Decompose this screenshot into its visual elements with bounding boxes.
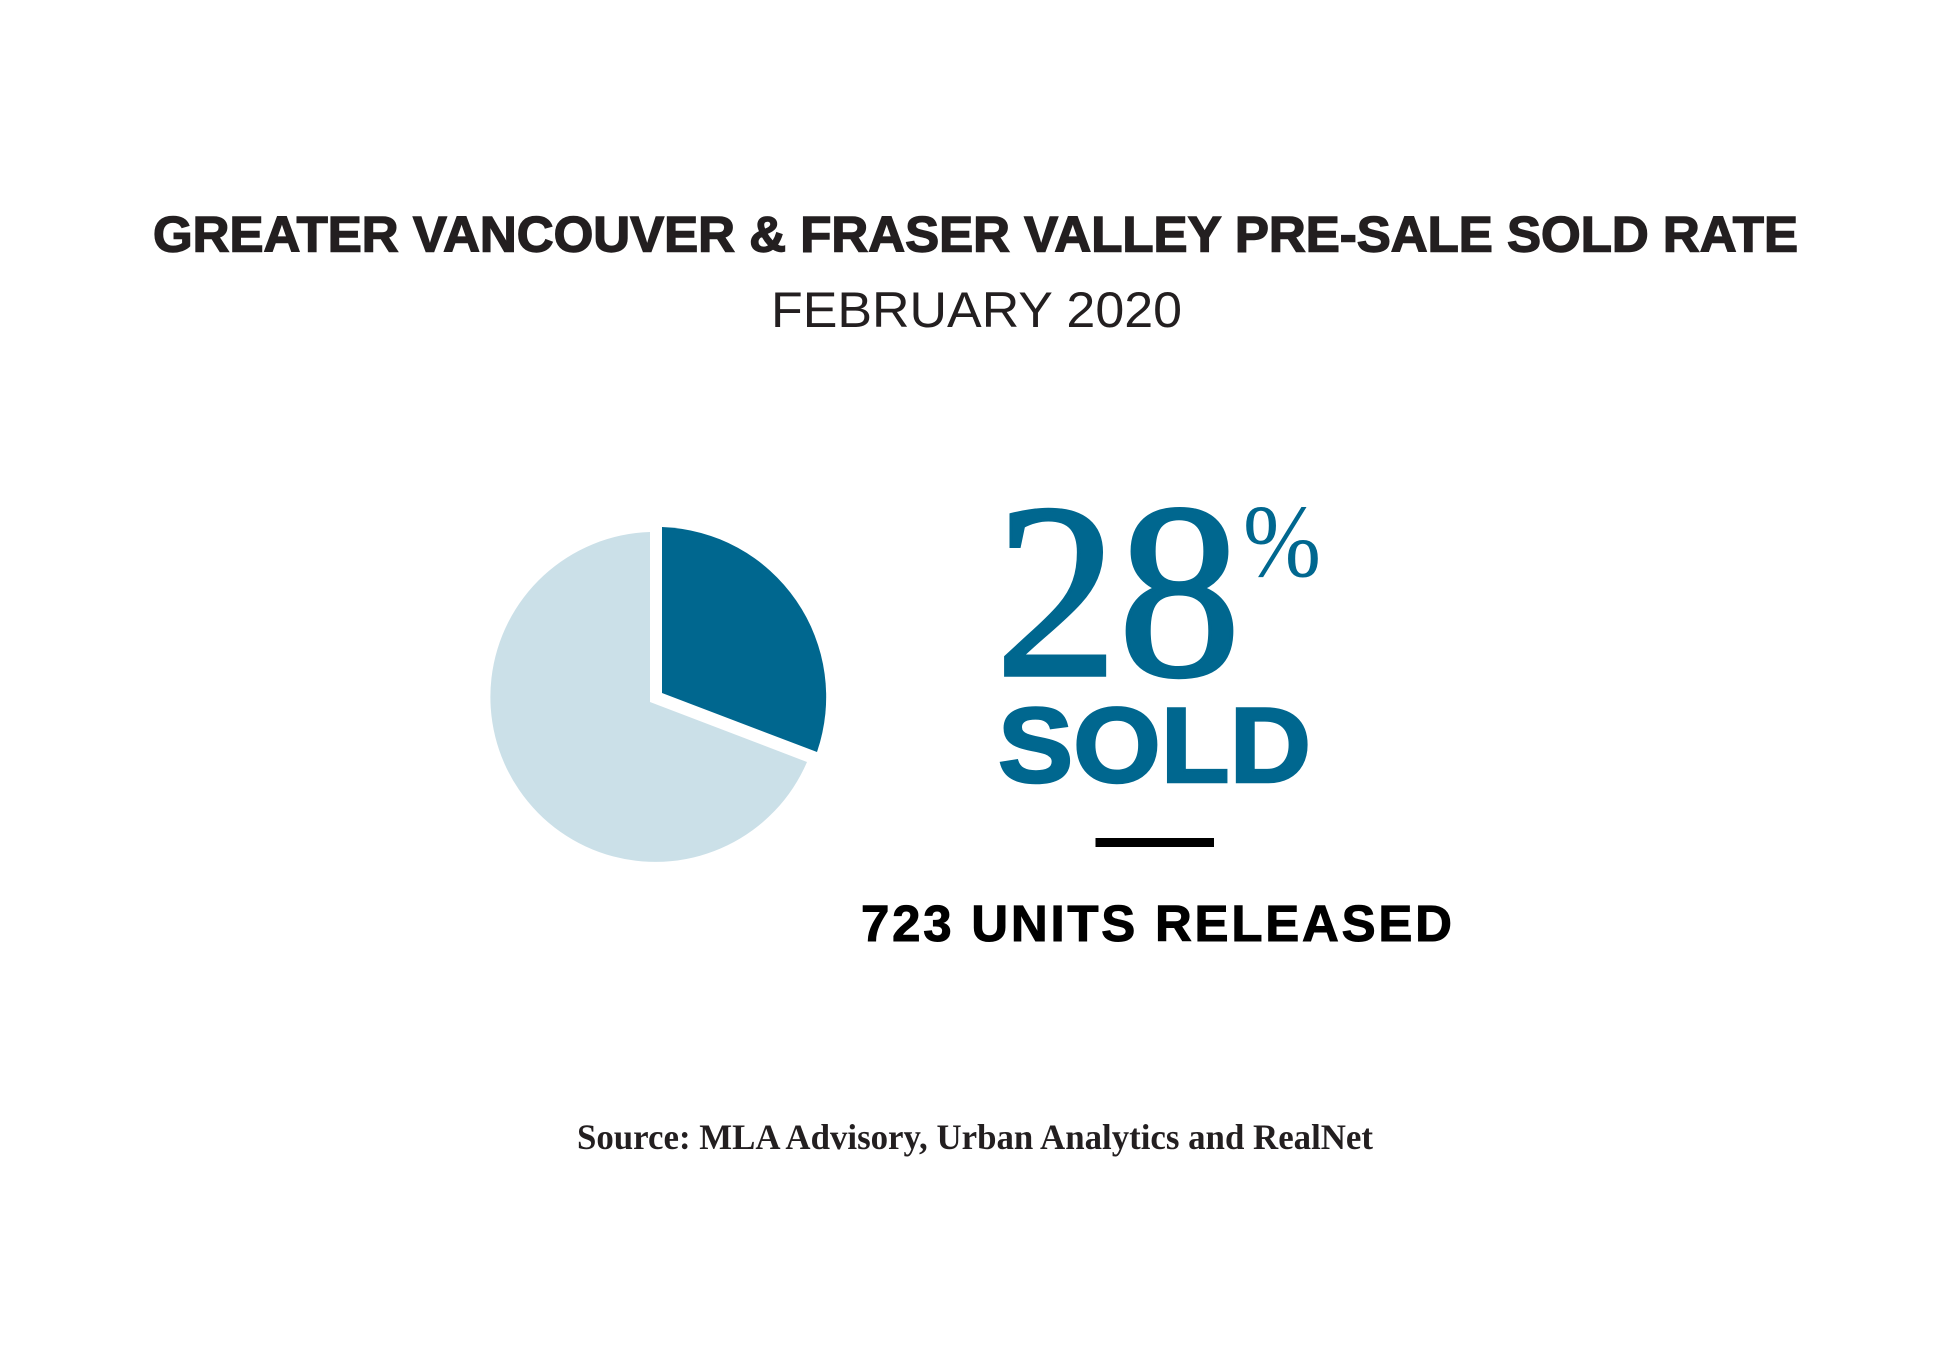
divider bar xyxy=(1096,838,1214,847)
pie slice: unsold share xyxy=(490,532,807,862)
title: GREATER VANCOUVER & FRASER VALLEY PRE-SALE SOLD RATE xyxy=(153,206,1798,262)
source note: Source: MLA Advisory, Urban Analytics and RealNet xyxy=(577,1117,1373,1157)
label: sold: SOLD xyxy=(998,685,1311,805)
pie chart: 28% sold xyxy=(490,527,826,862)
big number: 28: 28 xyxy=(995,453,1241,730)
label: units released: 723 UNITS RELEASED xyxy=(861,895,1452,952)
pie slice: sold share xyxy=(662,527,826,752)
percent sign: % xyxy=(1243,484,1321,599)
subtitle: date: FEBRUARY 2020 xyxy=(771,282,1182,338)
